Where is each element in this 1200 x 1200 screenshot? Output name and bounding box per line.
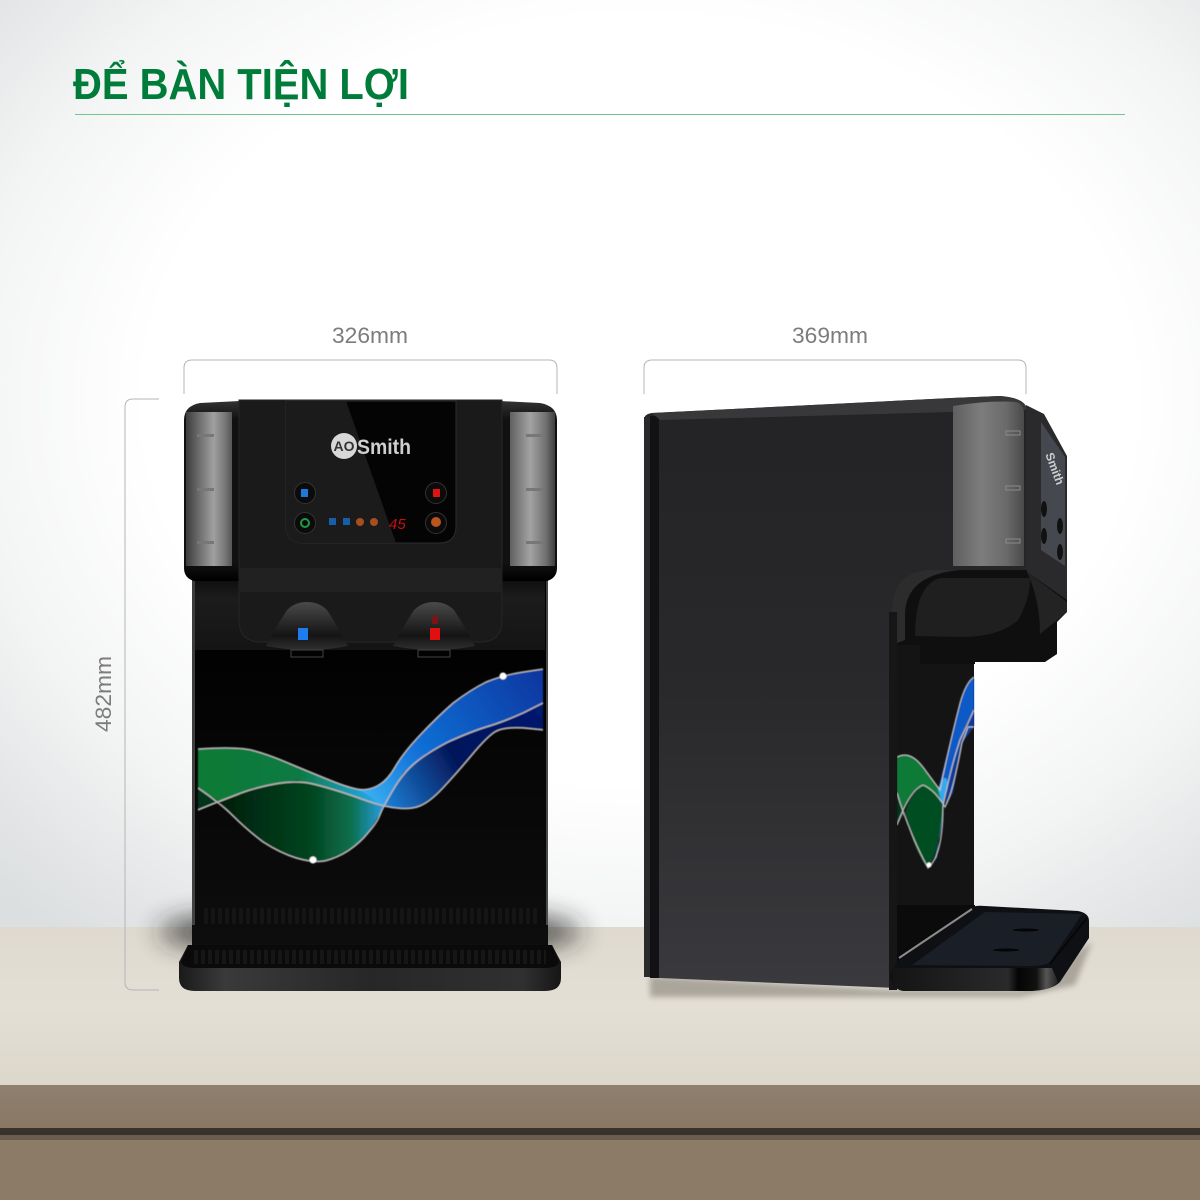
translucent tank [953, 402, 1024, 566]
logo: AO [334, 438, 355, 454]
wave graphic [198, 669, 543, 864]
title underline [75, 114, 1125, 115]
top edge [652, 396, 1027, 420]
side column front edge [889, 612, 897, 990]
floor shadow [158, 908, 582, 956]
dimension: side width: 369mm [792, 323, 868, 348]
hot spout [393, 602, 475, 657]
drip tray side [890, 906, 1089, 991]
body [192, 575, 548, 960]
left tank [184, 401, 240, 581]
logo: Smith [357, 436, 411, 459]
drip tray grille [200, 905, 542, 927]
back column [644, 396, 1027, 988]
product: side view [644, 396, 1092, 997]
dimension: height: 482mm [91, 656, 116, 732]
counter front edge and cabinet [0, 1085, 1200, 1200]
cold spout [266, 602, 348, 657]
dimension: side width [644, 323, 1026, 394]
side wave graphic [897, 677, 974, 868]
countertop [0, 927, 1200, 1087]
spout housing [892, 570, 1067, 664]
indicator icons [329, 518, 378, 526]
right tank [500, 401, 557, 581]
control panel side: Smith [1042, 451, 1067, 487]
central console [239, 400, 502, 642]
title: ĐỂ BÀN TIỆN LỢI [73, 58, 409, 109]
temperature readout: 45 [389, 516, 406, 533]
dimension: front width [184, 323, 557, 394]
logo [331, 433, 411, 459]
background wall [0, 0, 1200, 930]
recess behind wave [896, 636, 974, 971]
product: front view [158, 400, 582, 991]
buttons [294, 482, 316, 504]
drip tray [179, 945, 561, 991]
control panel [286, 401, 456, 543]
floor shadow [650, 942, 1092, 997]
dimension: height [91, 399, 159, 990]
shoulder band [195, 575, 545, 650]
recess floor [897, 905, 975, 962]
dimension: front width: 326mm [332, 323, 408, 348]
control panel side [1026, 405, 1067, 625]
